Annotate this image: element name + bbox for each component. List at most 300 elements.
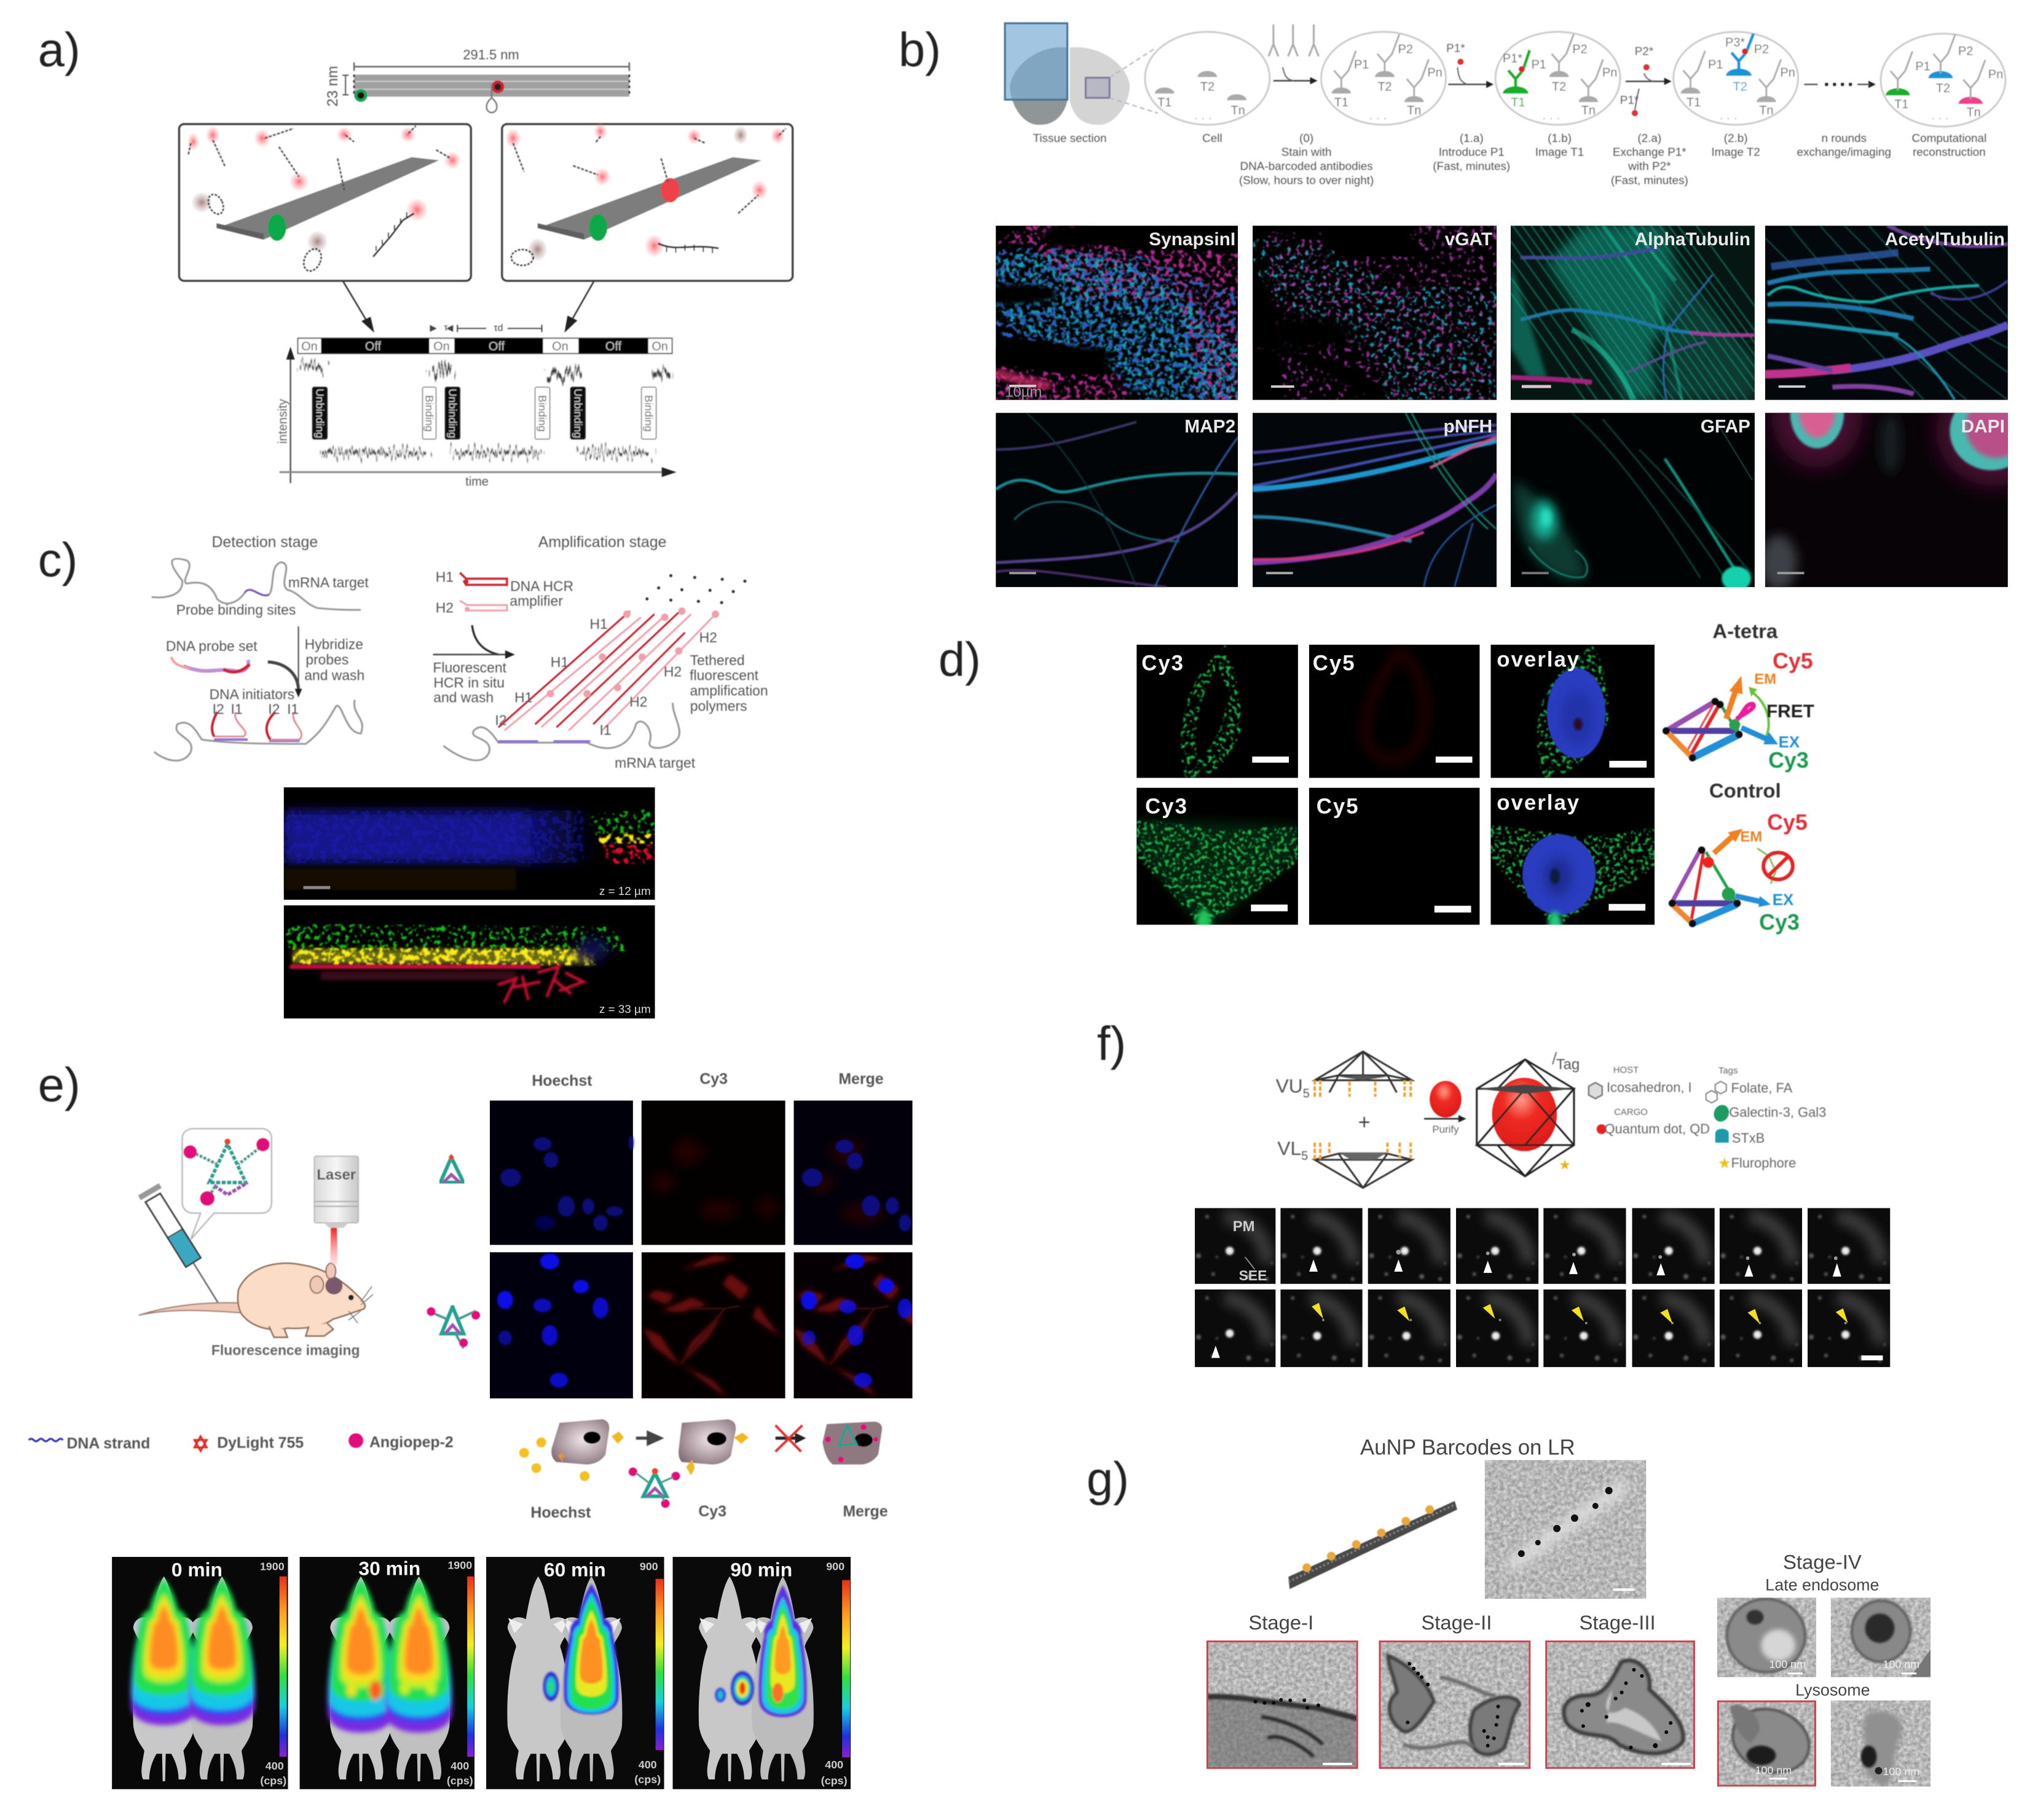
- workflow arrows and probes: [1269, 25, 1876, 116]
- column headings: Merge: [838, 1071, 884, 1088]
- cell circles with antibodies: P2: [1398, 43, 1413, 57]
- step captions: (Slow, hours to over night): [1239, 174, 1374, 187]
- image: GFAP: [1511, 413, 1755, 588]
- amplification stage schematic: DNA HCR: [510, 578, 573, 594]
- step captions: (Fast, minutes): [1433, 160, 1510, 173]
- diagram: A-tetra FRET: EX: [1779, 734, 1800, 751]
- image: Stage-I: [1207, 1641, 1358, 1769]
- schematic: icosahedron halves: ★: [1559, 1157, 1571, 1173]
- step captions: (Fast, minutes): [1611, 174, 1688, 187]
- amplification stage schematic: Amplification stage: [538, 534, 666, 551]
- image: 0 min mice: [112, 1556, 288, 1789]
- image: 90 min mice: 400: [825, 1759, 843, 1771]
- arrow: bound to on state: [564, 282, 594, 333]
- image: SynapsinI: 10µm: [1005, 384, 1042, 401]
- image: Cy3 Control: [1136, 788, 1298, 924]
- image: 60 min mice: 900: [640, 1561, 658, 1573]
- uptake mechanism schematic: Merge: [843, 1503, 888, 1520]
- image: 90 min mice: [672, 1557, 851, 1789]
- stage IV headings: Late endosome: [1765, 1575, 1879, 1594]
- column headings: Hoechst: [532, 1073, 592, 1090]
- diagram: Control no FRET: EX: [1773, 892, 1794, 909]
- amplification stage schematic: H2: [629, 693, 647, 709]
- image: Stage-II: [1379, 1641, 1530, 1769]
- icon: syringe: [140, 1186, 219, 1304]
- image: Cy5 A-tetra: Cy5: [1313, 652, 1356, 676]
- intensity time trace: [277, 322, 676, 489]
- cell circles with antibodies: T2: [1733, 80, 1747, 93]
- detection stage schematic: Detection stage: [211, 534, 318, 551]
- image: Cy3 with peptide: [642, 1252, 785, 1399]
- diagram: A-tetra FRET: A-tetra: [1712, 620, 1778, 642]
- cell circles with antibodies: P3*: [1725, 36, 1745, 50]
- amplification stage schematic: Tethered: [690, 652, 745, 668]
- column headings: [532, 1071, 884, 1090]
- legend: host, cargo, tags: Folate, FA: [1731, 1080, 1793, 1095]
- cell circles with antibodies: [1145, 32, 2006, 127]
- image: vGAT: [1253, 226, 1497, 400]
- step captions: Exchange P1*: [1613, 146, 1687, 159]
- step captions: Introduce P1: [1439, 146, 1505, 159]
- stage headings: [1248, 1611, 1656, 1634]
- image: AlphaTubulin: AlphaTubulin: [1635, 229, 1750, 250]
- intensity time trace: On: [301, 340, 318, 353]
- image: late endosome 2: [1831, 1597, 1931, 1677]
- frame 11: [1368, 1290, 1451, 1368]
- image grid: protein targets: [968, 223, 2043, 591]
- image: 30 min mice: (cps): [447, 1775, 473, 1787]
- image: z = 33 um: z = 33 µm: [599, 1003, 651, 1016]
- legend: DNA strand: [66, 1435, 150, 1452]
- detection stage schematic: probes: [305, 652, 348, 668]
- step captions: with P2*: [1628, 160, 1671, 173]
- image strip: time-lapse row 2: [1195, 1290, 1890, 1368]
- schematic: icosahedron halves: [1276, 1052, 1580, 1188]
- frame 12: [1456, 1290, 1538, 1368]
- intensity time trace: On: [651, 340, 668, 353]
- step captions: (0): [1299, 132, 1313, 145]
- step captions: (1.a): [1460, 132, 1484, 145]
- amplification stage schematic: [433, 534, 768, 771]
- image: 90 min mice: (cps): [821, 1775, 848, 1787]
- cell circles with antibodies: P1*: [1503, 52, 1522, 65]
- diagram: Control no FRET: Control: [1709, 779, 1781, 802]
- cell circles with antibodies: P1: [1532, 58, 1546, 71]
- amplification stage schematic: polymers: [690, 698, 747, 714]
- cell circles with antibodies: ...: [1369, 109, 1390, 122]
- legend: host, cargo, tags: Quantum dot, QD: [1605, 1121, 1710, 1137]
- panel a: DNA-PAINT origami schematic: [38, 23, 793, 489]
- amplification stage schematic: amplifier: [510, 593, 563, 609]
- frame 1: SEE: [1239, 1267, 1267, 1283]
- legend: host, cargo, tags: HOST: [1613, 1065, 1639, 1076]
- image: GFAP: GFAP: [1701, 416, 1750, 436]
- stage IV headings: [1765, 1550, 1879, 1699]
- label g): g): [1087, 1453, 1129, 1506]
- legend: [29, 1433, 454, 1452]
- cell circles with antibodies: Pn: [1988, 68, 2003, 81]
- intensity time trace: time: [465, 475, 489, 489]
- diagram: Control no FRET: Cy5: [1767, 810, 1808, 835]
- image: 0 min mice: 1900: [260, 1561, 285, 1573]
- frame 8: [1808, 1208, 1890, 1286]
- diagram: Control no FRET: [1669, 779, 1808, 934]
- image: Hoechst without peptide: [490, 1101, 634, 1245]
- workflow arrows and probes: P1*: [1446, 42, 1465, 55]
- image: 60 min mice: 60 min: [544, 1559, 606, 1581]
- image: 60 min mice: 400: [639, 1759, 657, 1771]
- intensity time trace: On: [433, 340, 450, 353]
- image: Cy5 Control: Cy5: [1317, 794, 1360, 818]
- schematic: exchange workflow: [1005, 23, 2006, 187]
- step captions: n rounds: [1821, 132, 1867, 145]
- image: Cy3 A-tetra: [1136, 644, 1298, 778]
- cell circles with antibodies: ...: [1194, 109, 1216, 122]
- legend: host, cargo, tags: STxB: [1732, 1130, 1765, 1146]
- origami dimensions diagram: 23 nm: [325, 66, 341, 106]
- image: AcetylTubulin: AcetylTubulin: [1885, 229, 2005, 250]
- intensity time trace: τd: [494, 323, 503, 333]
- step captions: DNA-barcoded antibodies: [1240, 160, 1373, 173]
- cell circles with antibodies: T1: [1511, 96, 1525, 109]
- frame 5: [1543, 1208, 1626, 1286]
- icon: cell with internalised nanostructure: [822, 1422, 882, 1465]
- detection stage schematic: I1: [231, 701, 243, 717]
- cell circles with antibodies: Pn: [1780, 66, 1795, 79]
- intensity time trace: Off: [605, 340, 622, 353]
- frame 16: [1808, 1290, 1890, 1368]
- detection stage schematic: DNA initiators: [210, 687, 294, 703]
- image: late endosome 1: 100 nm: [1769, 1658, 1806, 1671]
- amplification stage schematic: H2: [699, 629, 717, 645]
- icon: speech bubble with tetrahedron: [183, 1129, 272, 1239]
- icon: laser objective: Laser: [317, 1167, 356, 1183]
- amplification stage schematic: amplification: [690, 683, 768, 699]
- cell circles with antibodies: Tn: [1967, 106, 1981, 119]
- frame 14: [1632, 1290, 1715, 1368]
- cell circles with antibodies: P1: [1915, 60, 1931, 73]
- image: 0 min mice: 0 min: [171, 1559, 222, 1581]
- amplification stage schematic: I2: [495, 712, 506, 728]
- origami dimensions diagram: [325, 47, 629, 112]
- stage headings: Stage-I: [1248, 1611, 1313, 1634]
- image: merge without peptide: [794, 1101, 913, 1245]
- image: 90 min mice: 90 min: [730, 1559, 792, 1581]
- schematic: icosahedron halves: 5: [1303, 1087, 1310, 1100]
- cell circles with antibodies: Tn: [1581, 104, 1596, 117]
- frame 1: [1195, 1208, 1277, 1286]
- heading: AuNP Barcodes on LR: [1360, 1435, 1575, 1459]
- image: 30 min mice: 30 min: [358, 1558, 420, 1580]
- diagram: A-tetra FRET: Cy5: [1773, 649, 1813, 674]
- cell circles with antibodies: P2: [1572, 43, 1588, 57]
- image: pNFH: pNFH: [1444, 416, 1492, 436]
- schematic: icosahedron halves: +: [1358, 1111, 1371, 1134]
- amplification stage schematic: fluorescent: [690, 668, 759, 683]
- icon: brain tissue section: [1005, 23, 1158, 125]
- amplification stage schematic: H1: [436, 569, 454, 585]
- image: lysosome 1: 100 nm: [1755, 1764, 1792, 1776]
- cell circles with antibodies: ...: [1542, 109, 1564, 122]
- cell circles with antibodies: ...: [1931, 109, 1953, 122]
- detection stage schematic: I2: [213, 701, 224, 717]
- cell circles with antibodies: Pn: [1427, 66, 1443, 79]
- image: 0 min mice: 400: [266, 1760, 284, 1772]
- image: pNFH: [1253, 413, 1497, 588]
- image: late endosome 1: [1717, 1597, 1816, 1677]
- amplification stage schematic: HCR in situ: [433, 675, 505, 691]
- cell circles with antibodies: Tn: [1231, 104, 1245, 117]
- column headings: Cy3: [699, 1071, 728, 1088]
- image: 90 min mice: 900: [826, 1561, 844, 1573]
- diagram: Control no FRET: Cy3: [1759, 910, 1800, 934]
- schematic: icosahedron halves: VL: [1277, 1137, 1301, 1159]
- image: overlay Control: [1490, 788, 1655, 924]
- diagram: Control no FRET: EM: [1740, 829, 1762, 845]
- cell circles with antibodies: P2: [1958, 45, 1973, 58]
- intensity time trace: Unbinding: [572, 388, 584, 438]
- image: Cy5 Control: [1309, 788, 1480, 924]
- image: Cy5 A-tetra: [1309, 644, 1480, 778]
- intensity time trace: Binding: [643, 395, 655, 431]
- detection stage schematic: mRNA target: [288, 574, 369, 590]
- image: DAPI: DAPI: [1961, 416, 2005, 436]
- image: 30 min mice: [300, 1556, 474, 1789]
- cell circles with antibodies: ...: [1720, 109, 1741, 122]
- panel b: multiplexed imaging: [899, 23, 2043, 591]
- illustration: mouse injection and laser: Fluorescence imaging: [211, 1342, 360, 1358]
- stage headings: Stage-III: [1580, 1611, 1656, 1634]
- cell circles with antibodies: T2: [1377, 80, 1392, 93]
- intensity time trace: τ: [444, 322, 447, 333]
- detection stage schematic: [152, 534, 369, 760]
- icon: DNA rod with gold particles: [1288, 1501, 1457, 1589]
- intensity time trace: Unbinding: [446, 388, 459, 438]
- frame 1: PM: [1233, 1218, 1255, 1235]
- schematic: icosahedron halves: VU: [1276, 1074, 1303, 1097]
- cell circles with antibodies: P2: [1754, 43, 1769, 57]
- frame 2: [1280, 1208, 1363, 1286]
- schematic: icosahedron halves: Purify: [1432, 1124, 1459, 1135]
- icon: laser objective: [314, 1156, 358, 1265]
- image: 30 min mice: 400: [451, 1760, 469, 1772]
- cell circles with antibodies: P1: [1708, 58, 1723, 71]
- image: TEM of barcode: [1485, 1460, 1646, 1599]
- image: z = 33 um: [284, 905, 655, 1018]
- frame 13: [1543, 1290, 1626, 1368]
- frame 10: [1280, 1290, 1363, 1368]
- arrow: unbound to off state: [343, 282, 374, 333]
- frame 4: [1456, 1208, 1538, 1286]
- box: unbound state: [179, 124, 471, 281]
- intensity time trace: On: [552, 340, 569, 353]
- panel d: FRET tetrahedron: [939, 620, 1814, 938]
- origami dimensions diagram: 291.5 nm: [463, 47, 519, 63]
- label d): d): [939, 634, 981, 687]
- image: Cy3 Control: Cy3: [1145, 794, 1188, 818]
- label a): a): [38, 23, 81, 76]
- amplification stage schematic: I1: [600, 722, 612, 738]
- cell circles with antibodies: Tn: [1407, 104, 1421, 117]
- stage IV headings: Stage-IV: [1783, 1550, 1862, 1573]
- image: z = 12 um: z = 12 µm: [599, 885, 651, 898]
- targets: [1155, 71, 1776, 102]
- step captions: Computational: [1911, 132, 1986, 145]
- frame 15: [1720, 1290, 1802, 1368]
- image: overlay A-tetra: [1490, 644, 1655, 778]
- image: SynapsinI: [996, 226, 1238, 401]
- cell circles with antibodies: T1: [1334, 96, 1348, 109]
- amplification stage schematic: mRNA target: [615, 755, 696, 771]
- step captions: (1.b): [1548, 132, 1572, 145]
- amplification stage schematic: H1: [551, 654, 569, 670]
- legend: Angiopep-2: [369, 1434, 454, 1451]
- image: lysosome 1: [1717, 1699, 1818, 1787]
- intensity time trace: Off: [489, 340, 505, 353]
- icon: plain tetrahedron: [440, 1155, 463, 1183]
- legend: DyLight 755: [217, 1435, 304, 1452]
- detection stage schematic: I1: [287, 701, 299, 717]
- image: Hoechst with peptide: [490, 1252, 633, 1398]
- step captions: Image T1: [1535, 146, 1584, 159]
- uptake mechanism schematic: Cy3: [698, 1503, 726, 1520]
- image: overlay A-tetra: overlay: [1497, 648, 1580, 672]
- image strip: time-lapse row 1: [1195, 1208, 1890, 1286]
- image: lysosome 2: 100 nm: [1883, 1765, 1919, 1778]
- legend: host, cargo, tags: CARGO: [1614, 1107, 1648, 1117]
- image: late endosome 2: 100 nm: [1883, 1658, 1919, 1671]
- frame 6: [1632, 1208, 1715, 1286]
- schematic: icosahedron halves: 5: [1301, 1149, 1308, 1163]
- icon: cell with transport: [679, 1419, 749, 1475]
- diagram: A-tetra FRET: FRET: [1766, 701, 1814, 722]
- step captions: reconstruction: [1913, 146, 1986, 159]
- frame 9: [1195, 1290, 1277, 1368]
- cell circles with antibodies: T1: [1157, 96, 1171, 109]
- cell circles with antibodies: Pn: [1602, 66, 1617, 79]
- image: AlphaTubulin: [1511, 226, 1755, 400]
- frame 7: [1720, 1208, 1802, 1286]
- panel g: AuNP barcodes: [1087, 1435, 1931, 1787]
- intensity time trace: Binding: [537, 395, 549, 431]
- cell circles with antibodies: T2: [1552, 80, 1566, 93]
- amplification stage schematic: and wash: [433, 690, 494, 706]
- label e): e): [38, 1059, 81, 1112]
- image: merge with peptide: [794, 1252, 913, 1399]
- image: 60 min mice: (cps): [634, 1773, 661, 1786]
- image: 30 min mice: 1900: [447, 1559, 472, 1572]
- image: SynapsinI: SynapsinI: [1149, 229, 1235, 250]
- workflow arrows and probes: P2*: [1635, 45, 1654, 58]
- step captions: (2.a): [1637, 132, 1661, 145]
- icon: Angiopep tetrahedron: [427, 1307, 480, 1349]
- stage headings: Stage-II: [1421, 1611, 1492, 1634]
- legend: host, cargo, tags: Tags: [1718, 1066, 1738, 1076]
- cell circles with antibodies: T2: [1936, 82, 1950, 95]
- step captions: [1033, 132, 1986, 187]
- cell circles with antibodies: T1: [1894, 98, 1908, 111]
- schematic: icosahedron halves: Tag: [1556, 1057, 1580, 1073]
- icon: blocked arrow: [776, 1425, 806, 1452]
- amplification stage schematic: Fluorescent: [433, 660, 507, 676]
- diagram: A-tetra FRET: Cy3: [1768, 748, 1809, 773]
- stage IV headings: Lysosome: [1795, 1680, 1870, 1699]
- image: z = 12 um: [284, 787, 655, 900]
- image: Stage-III: [1545, 1641, 1695, 1769]
- legend: host, cargo, tags: Flurophore: [1731, 1156, 1796, 1171]
- image: Cy3 A-tetra: Cy3: [1141, 652, 1184, 676]
- panel f: icosahedron assembly: [1097, 1018, 1890, 1368]
- panel e: in vivo imaging: [29, 1059, 931, 1789]
- image: overlay Control: overlay: [1497, 790, 1580, 814]
- image: Cy3 without peptide: [642, 1101, 785, 1245]
- uptake mechanism schematic: Hoechst: [530, 1504, 591, 1521]
- detection stage schematic: Hybridize: [305, 636, 363, 652]
- legend: host, cargo, tags: Galectin-3, Gal3: [1729, 1105, 1826, 1120]
- icon: mouse: [139, 1263, 373, 1337]
- diagram: A-tetra FRET: EM: [1754, 671, 1776, 687]
- legend: host, cargo, tags: [1589, 1065, 1826, 1172]
- cell circles with antibodies: P1: [1354, 58, 1369, 71]
- amplification stage schematic: H1: [514, 690, 532, 706]
- illustration: mouse injection and laser: [139, 1129, 373, 1358]
- icon: tetrahedron with peptides: [629, 1468, 680, 1508]
- workflow arrows and probes: P1*: [1620, 94, 1639, 107]
- amplification stage schematic: H2: [436, 599, 454, 615]
- detection stage schematic: I2: [268, 701, 280, 717]
- image: vGAT: vGAT: [1445, 229, 1492, 250]
- step captions: (2.b): [1724, 132, 1748, 145]
- amplification stage schematic: H1: [589, 616, 608, 632]
- image: MAP2: [996, 413, 1238, 588]
- cell circles with antibodies: Tn: [1759, 104, 1773, 117]
- label c): c): [38, 534, 77, 587]
- detection stage schematic: DNA probe set: [166, 638, 258, 654]
- frame 3: [1368, 1208, 1451, 1286]
- detection stage schematic: and wash: [304, 668, 364, 683]
- detection stage schematic: Probe binding sites: [176, 602, 296, 618]
- intensity time trace: intensity: [277, 399, 290, 444]
- uptake mechanism schematic: [519, 1419, 888, 1521]
- label b): b): [899, 23, 941, 76]
- image: MAP2: MAP2: [1184, 416, 1235, 436]
- cell circles with antibodies: T1: [1687, 96, 1701, 109]
- step captions: Tissue section: [1033, 132, 1107, 145]
- panel c: HCR in situ: [38, 534, 768, 1018]
- legend: host, cargo, tags: Icosahedron, I: [1607, 1079, 1692, 1095]
- image: lysosome 2: [1831, 1700, 1931, 1787]
- image: 60 min mice: [486, 1556, 664, 1789]
- step captions: Stain with: [1281, 146, 1332, 159]
- box: bound state: [502, 124, 793, 281]
- image: 0 min mice: (cps): [260, 1775, 286, 1787]
- icon: cell without nanostructure: [519, 1419, 624, 1481]
- intensity time trace: Unbinding: [313, 388, 326, 438]
- legend: host, cargo, tags: ★: [1718, 1156, 1731, 1172]
- arrow: [636, 1433, 661, 1444]
- step captions: Image T2: [1711, 146, 1760, 159]
- step captions: exchange/imaging: [1797, 146, 1891, 159]
- step captions: Cell: [1202, 132, 1222, 145]
- intensity time trace: Binding: [423, 395, 436, 431]
- diagram: A-tetra FRET: [1663, 620, 1814, 773]
- image: AcetylTubulin: [1765, 226, 2008, 400]
- cell circles with antibodies: T2: [1200, 80, 1214, 93]
- label f): f): [1097, 1018, 1126, 1071]
- image: DAPI: [1765, 413, 2008, 588]
- amplification stage schematic: H2: [664, 664, 682, 680]
- intensity time trace: Off: [365, 340, 382, 353]
